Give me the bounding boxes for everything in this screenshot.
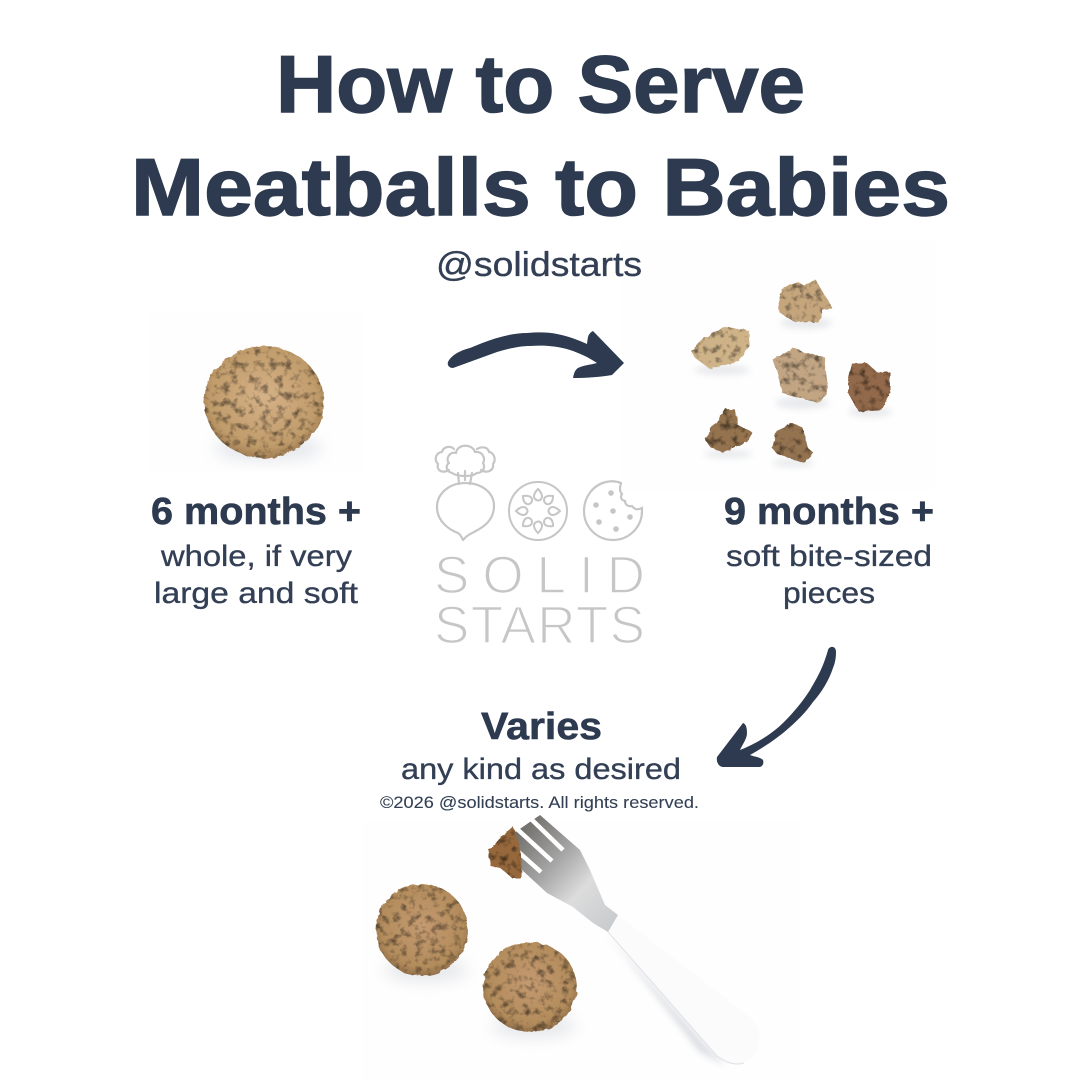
label: varies: any kind as desired	[401, 753, 681, 786]
piece: centre	[773, 348, 828, 403]
wordmark: solid: SOLID	[434, 546, 645, 605]
copyright: ©2026 @solidstarts. All rights reserved.	[380, 793, 699, 812]
meatball: left	[376, 884, 468, 976]
piece: top	[778, 279, 833, 323]
icon: beet	[436, 446, 495, 540]
arrow: pieces to varies	[717, 647, 836, 767]
icon: fork	[505, 815, 760, 1066]
arrow: whole to pieces	[448, 331, 624, 378]
piece: right	[848, 363, 890, 411]
piece: left	[691, 327, 750, 369]
logo: Solid Starts watermark	[434, 446, 645, 655]
photo: meatballs and fork	[362, 815, 800, 1080]
label: 9 months: soft bite-sized	[726, 540, 932, 573]
title: Meatballs to Babies	[131, 143, 950, 233]
label: 6 months: large and soft	[154, 577, 359, 610]
title	[131, 40, 950, 233]
photo: bite-sized pieces	[622, 240, 935, 490]
label: 6 months: 6 months +	[151, 491, 361, 533]
label: 6 months: whole, if very	[160, 540, 352, 573]
photo: whole meatball	[150, 312, 365, 472]
piece: bottom left	[704, 408, 752, 453]
label: varies: Varies	[481, 706, 602, 748]
icon: cookie	[584, 481, 642, 540]
handle: @solidstarts: @solidstarts	[436, 246, 642, 284]
label: 9 months: 9 months +	[724, 491, 934, 533]
label: 9 months	[724, 491, 934, 610]
label: 6 months	[151, 491, 361, 610]
label: varies	[401, 706, 681, 786]
meatball: right	[483, 942, 577, 1032]
meatball piece on fork	[489, 827, 522, 878]
title: How to Serve	[276, 40, 805, 130]
wordmark: starts: STARTS	[434, 596, 645, 655]
piece: bottom middle	[772, 423, 814, 463]
icon: cucumber slice	[509, 482, 567, 540]
label: 9 months: pieces	[783, 577, 875, 610]
